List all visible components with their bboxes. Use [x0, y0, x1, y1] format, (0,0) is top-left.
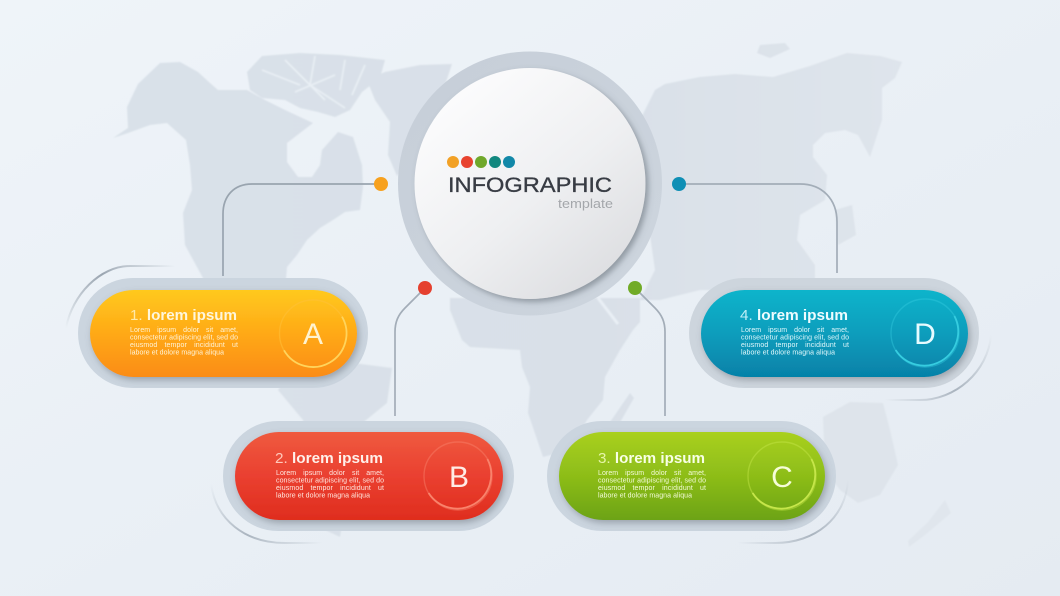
connector: D [672, 177, 837, 273]
panel D pill [701, 290, 968, 377]
panel D body: labore et dolore magna aliqua [741, 350, 835, 356]
dot: red [418, 281, 432, 295]
arc: C [738, 480, 848, 543]
dot: orange [374, 177, 388, 191]
panel B body [276, 470, 384, 500]
panel D body [741, 327, 849, 356]
map: Greenland [367, 64, 452, 176]
map: North America [113, 62, 363, 365]
connector: A [223, 177, 388, 276]
panel A body: consectetur adipiscing elit, sed do [130, 334, 238, 342]
map: Australia [823, 402, 898, 503]
panel B outer [223, 421, 514, 531]
connector: C [628, 281, 665, 416]
map: Africa and Arabia [450, 298, 640, 457]
map: Novaya Zemlya [757, 43, 790, 58]
panel C body: Lorem ipsum dolor sit amet, [598, 470, 706, 477]
map: Red Sea [598, 298, 618, 324]
world map [113, 43, 951, 547]
panel C body [598, 470, 706, 500]
map: Eurasia [632, 53, 902, 300]
panel C heading: 3. lorem ipsum [598, 450, 705, 467]
panel D heading: 4. lorem ipsum [740, 307, 848, 324]
panel A outer [78, 278, 368, 388]
panel: A [78, 278, 368, 388]
panel A body: labore et dolore magna aliqua [130, 350, 224, 356]
panel B body: labore et dolore magna aliqua [276, 492, 370, 500]
panel C pill [559, 432, 825, 520]
map: Madagascar [608, 393, 634, 426]
panel B pill [235, 432, 503, 520]
panel C body: eiusmod tempor incididunt ut [598, 485, 706, 492]
panel D body: eiusmod tempor incididunt ut [741, 342, 849, 349]
panel B body: Lorem ipsum dolor sit amet, [276, 470, 384, 477]
map: arctic channels [262, 56, 365, 108]
panel A badge: A [303, 318, 323, 351]
arc: D [885, 335, 991, 400]
panel A pill [90, 290, 357, 377]
panel B body: eiusmod tempor incididunt ut [276, 485, 384, 492]
map: South America [278, 362, 392, 537]
panel: C [547, 421, 836, 531]
map: New Zealand [908, 500, 951, 547]
panel A body: Lorem ipsum dolor sit amet, [130, 327, 238, 334]
panel D body: Lorem ipsum dolor sit amet, [741, 327, 849, 334]
arc: A [66, 266, 175, 328]
central circle [398, 52, 662, 316]
panel A heading: 1. lorem ipsum [130, 307, 237, 324]
title: INFOGRAPHIC [448, 173, 612, 197]
dot: green [628, 281, 642, 295]
outer ring [398, 52, 662, 316]
panel D badge: D [914, 318, 936, 351]
connector: B [395, 281, 432, 416]
panel A badge [280, 300, 347, 367]
colour dots [447, 156, 515, 168]
subtitle: template [558, 196, 613, 211]
arc: B [211, 484, 322, 543]
panel C badge [748, 442, 816, 510]
panel: D [689, 278, 979, 388]
map: Arctic islands [247, 53, 385, 117]
panel B heading: 2. lorem ipsum [275, 450, 383, 467]
panel C badge: C [771, 461, 793, 494]
panel B badge: B [449, 461, 469, 494]
panel C body: consectetur adipiscing elit, sed do [598, 478, 706, 484]
panel B badge [424, 442, 492, 510]
panel D badge [891, 299, 959, 367]
panel B body: consectetur adipiscing elit, sed do [276, 478, 384, 484]
panel C body: labore et dolore magna aliqua [598, 492, 692, 500]
panel A body: eiusmod tempor incididunt ut [130, 342, 238, 349]
white disc [414, 68, 646, 299]
panel D outer [689, 278, 979, 388]
panel C outer [547, 421, 836, 531]
panel: B [223, 421, 514, 531]
map: Japan [835, 205, 856, 245]
panel A body [130, 327, 238, 356]
dot: blue [672, 177, 686, 191]
panel D body: consectetur adipiscing elit, sed do [741, 334, 849, 342]
